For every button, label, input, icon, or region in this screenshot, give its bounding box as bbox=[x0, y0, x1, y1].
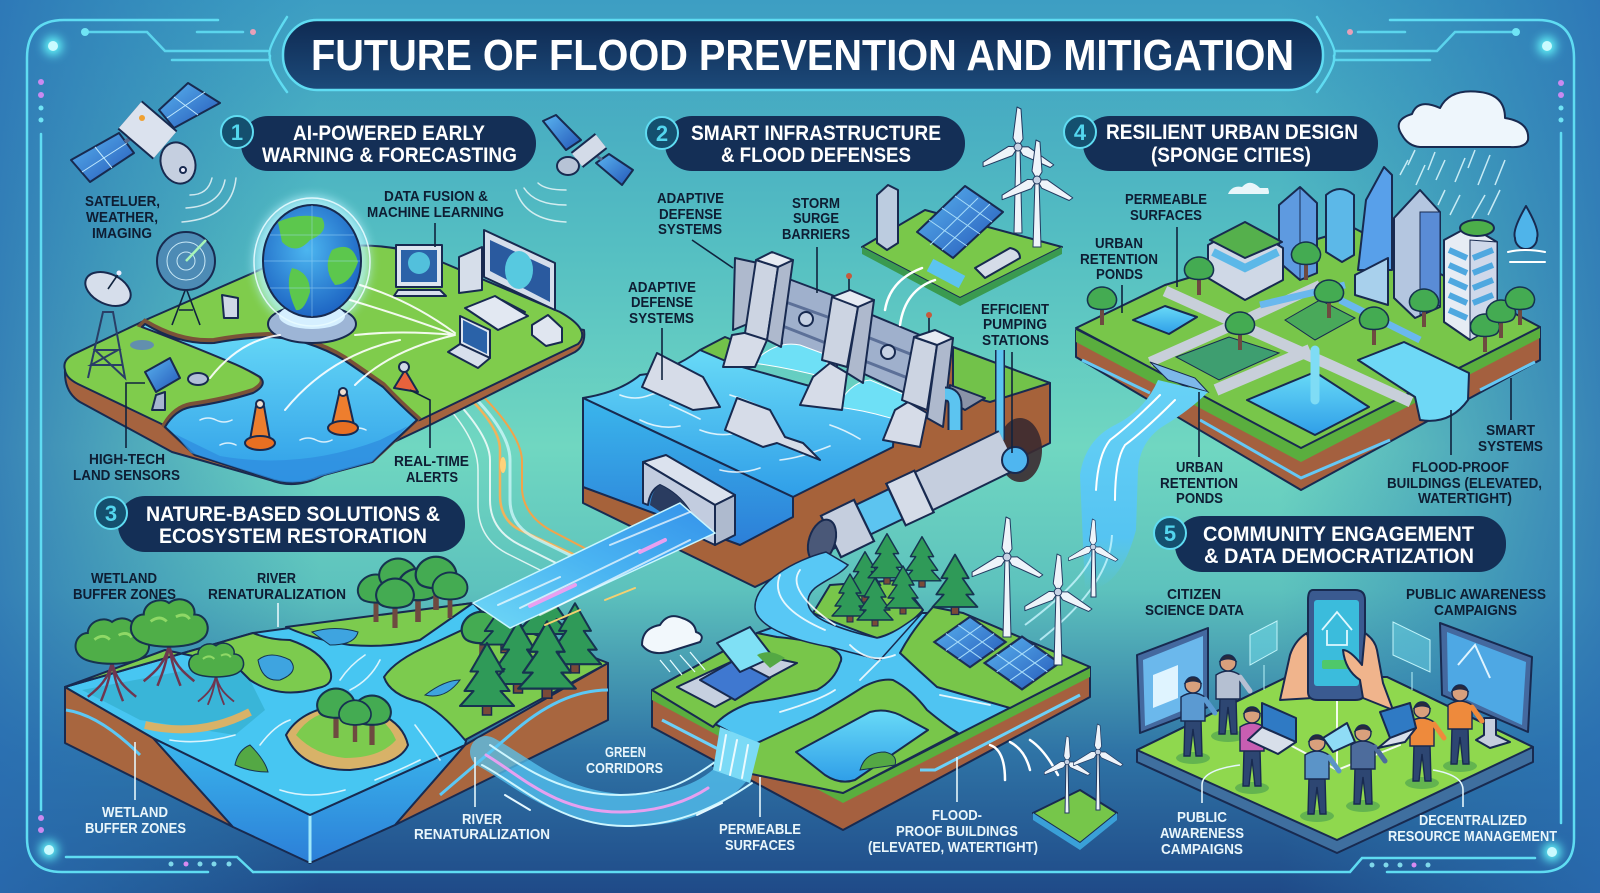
labels panel 5: CITIZEN bbox=[1167, 586, 1221, 603]
front bank bbox=[713, 680, 958, 793]
pipes bbox=[803, 350, 1042, 566]
retention pond bbox=[796, 711, 928, 782]
cascading water bbox=[753, 344, 910, 420]
labels panel 1 bbox=[73, 188, 504, 486]
buoys bbox=[245, 388, 358, 450]
storm surge gates bbox=[778, 275, 920, 400]
section heading 1 bbox=[221, 116, 536, 171]
culvert tunnel bbox=[643, 455, 735, 545]
leader lines bbox=[126, 223, 1511, 817]
labels panel 5: PUBLIC AWARENESS bbox=[1406, 586, 1546, 603]
panel 3: nature-based solutions bbox=[65, 557, 608, 863]
dish tower bbox=[80, 265, 136, 378]
river and lake bbox=[142, 322, 417, 481]
analysis arcs bbox=[210, 285, 455, 410]
forest peninsula bbox=[813, 580, 923, 638]
radar bbox=[157, 232, 215, 325]
section heading 4: 4 bbox=[1074, 120, 1087, 145]
panel 2: smart infrastructure bbox=[583, 252, 1050, 587]
title banner bbox=[283, 20, 1323, 90]
labels panel 3: WETLAND bbox=[91, 570, 157, 587]
labels panel 1: IMAGING bbox=[92, 225, 152, 242]
floating data cards bbox=[1250, 621, 1430, 690]
labels lower river island: (ELEVATED, WATERTIGHT) bbox=[868, 839, 1038, 856]
labels panel 2: SYSTEMS bbox=[629, 310, 694, 327]
labels panel 3: RENATURALIZATION bbox=[414, 826, 550, 843]
rain cloud bbox=[1399, 91, 1528, 218]
labels panel 5: SCIENCE DATA bbox=[1145, 602, 1244, 619]
labels panel 5: CAMPAIGNS bbox=[1161, 841, 1243, 858]
section heading 5: 5 bbox=[1164, 521, 1176, 546]
labels panel 4: PONDS bbox=[1176, 490, 1223, 507]
labels panel 3: BUFFER ZONES bbox=[85, 820, 186, 837]
labels panel 2: BARRIERS bbox=[782, 226, 850, 243]
labels lower river island: CORRIDORS bbox=[586, 760, 663, 777]
labels panel 1: MACHINE LEARNING bbox=[367, 204, 504, 221]
solar panels bbox=[934, 617, 1059, 689]
labels panel 5 bbox=[1145, 586, 1557, 858]
water face bbox=[583, 398, 793, 545]
water plane bbox=[652, 613, 1090, 793]
section heading 2: SMART INFRASTRUCTURE bbox=[691, 122, 941, 145]
labels panel 1: SATELUER, bbox=[85, 193, 160, 210]
labels panel 1: DATA FUSION & bbox=[384, 188, 488, 205]
section heading 5 bbox=[1154, 516, 1506, 572]
city buildings bbox=[1208, 167, 1497, 340]
section heading 3: 3 bbox=[105, 501, 117, 526]
labels panel 2: EFFICIENT bbox=[981, 301, 1049, 318]
title text: FUTURE OF FLOOD PREVENTION AND MITIGATION bbox=[311, 31, 1294, 80]
solar and wind mini island bbox=[862, 107, 1075, 325]
labels panel 4: FLOOD-PROOF bbox=[1412, 459, 1509, 476]
river surface bbox=[65, 603, 495, 815]
labels panel 2: PUMPING bbox=[983, 316, 1047, 333]
labels panel 2: ADAPTIVE bbox=[657, 190, 724, 207]
satellite signal arcs bbox=[182, 178, 566, 222]
section heading 5: & DATA DEMOCRATIZATION bbox=[1204, 545, 1474, 568]
small rain cloud bbox=[642, 616, 705, 675]
labels panel 4: SMART bbox=[1486, 422, 1535, 439]
island ground bbox=[64, 246, 582, 440]
labels panel 4: WATERTIGHT) bbox=[1418, 490, 1512, 507]
section heading 5: COMMUNITY ENGAGEMENT bbox=[1203, 523, 1474, 546]
green roof device bbox=[677, 627, 797, 707]
right display bbox=[1440, 623, 1532, 748]
people bbox=[1176, 655, 1482, 822]
labels panel 2: ADAPTIVE bbox=[628, 279, 696, 296]
section heading 3: ECOSYSTEM RESTORATION bbox=[159, 525, 427, 548]
section heading 2 bbox=[646, 116, 965, 171]
green corridor stream bbox=[482, 745, 752, 826]
labels panel 3: RIVER bbox=[462, 811, 502, 828]
panel 4: resilient urban design bbox=[1025, 167, 1540, 640]
labels panel 3: RIVER bbox=[257, 570, 296, 587]
labels panel 4: RETENTION bbox=[1160, 475, 1238, 492]
forest trees bbox=[317, 557, 601, 745]
section heading 1: WARNING & FORECASTING bbox=[262, 144, 517, 167]
labels panel 3: RENATURALIZATION bbox=[208, 586, 346, 603]
panel 1: AI-powered early warning bbox=[64, 196, 584, 484]
section heading 2: 2 bbox=[656, 121, 668, 146]
labels panel 5: RESOURCE MANAGEMENT bbox=[1388, 828, 1557, 845]
section heading 1: AI-POWERED EARLY bbox=[293, 122, 485, 145]
island base bbox=[65, 300, 584, 484]
water drop icon bbox=[1508, 206, 1545, 262]
section heading 4: RESILIENT URBAN DESIGN bbox=[1106, 121, 1358, 144]
labels panel 4: BUILDINGS (ELEVATED, bbox=[1387, 475, 1542, 492]
section heading 4 bbox=[1064, 116, 1378, 171]
labels panel 5: DECENTRALIZED bbox=[1419, 812, 1527, 829]
labels panel 5: PUBLIC bbox=[1177, 809, 1227, 826]
labels panel 5: AWARENESS bbox=[1160, 825, 1244, 842]
labels panel 5: CAMPAIGNS bbox=[1434, 602, 1517, 619]
big satellite bbox=[71, 83, 220, 189]
ponds bbox=[1133, 300, 1469, 435]
labels panel 2: SURGE bbox=[793, 210, 839, 227]
labels panel 2: STATIONS bbox=[982, 332, 1049, 349]
panel 5: community engagement bbox=[1137, 590, 1533, 853]
diagonal flood channel bbox=[473, 503, 715, 628]
labels panel 1: LAND SENSORS bbox=[73, 467, 180, 484]
labels panel 4: URBAN bbox=[1176, 459, 1223, 476]
small white cloud bbox=[1228, 183, 1269, 194]
stream from outfall bbox=[755, 552, 923, 660]
section heading 1: 1 bbox=[231, 120, 243, 145]
labels panel 3: BUFFER ZONES bbox=[73, 586, 176, 603]
wind turbines bbox=[969, 517, 1119, 665]
labels panel 2: STORM bbox=[792, 195, 840, 212]
green land areas bbox=[65, 633, 331, 692]
data fusion computers bbox=[394, 230, 562, 368]
left display bbox=[1137, 628, 1208, 733]
island side bbox=[652, 667, 1090, 830]
labels panel 4: PONDS bbox=[1096, 266, 1143, 283]
right soil bbox=[395, 663, 608, 825]
waterfall bbox=[713, 727, 760, 783]
forest pines bbox=[832, 534, 978, 626]
island top bbox=[1076, 228, 1540, 448]
lower river island bbox=[652, 517, 1119, 830]
labels lower river island: SURFACES bbox=[725, 837, 795, 854]
labels panel 2: DEFENSE bbox=[631, 294, 693, 311]
left soil bbox=[65, 687, 233, 827]
labels panel 3 bbox=[73, 570, 550, 843]
labels panel 1: ALERTS bbox=[406, 469, 458, 486]
barrier piers bbox=[723, 252, 953, 447]
small satellite bbox=[543, 115, 633, 185]
section heading 3: NATURE-BASED SOLUTIONS & bbox=[146, 503, 440, 526]
labels panel 4: PERMEABLE bbox=[1125, 191, 1207, 208]
right bank bbox=[900, 607, 1090, 708]
water volume bbox=[153, 738, 465, 863]
green bank bbox=[953, 347, 1050, 402]
labels panel 4 bbox=[1080, 191, 1543, 507]
land sensors bbox=[130, 295, 238, 410]
labels panel 2: DEFENSE bbox=[659, 206, 722, 223]
labels panel 2 bbox=[628, 190, 1049, 349]
section heading 2: & FLOOD DEFENSES bbox=[721, 144, 911, 167]
data streams between panels bbox=[420, 366, 592, 570]
laptops bbox=[1248, 703, 1416, 754]
labels panel 4: SYSTEMS bbox=[1478, 438, 1543, 455]
labels panel 4: URBAN bbox=[1095, 235, 1143, 252]
labels lower river island: PROOF BUILDINGS bbox=[896, 823, 1018, 840]
walkway bbox=[948, 385, 985, 410]
alert beacon bbox=[394, 362, 418, 392]
flow ripples bbox=[170, 655, 440, 795]
globe bbox=[254, 196, 370, 343]
paths and canals bbox=[1150, 285, 1420, 402]
labels panel 1: REAL-TIME bbox=[394, 453, 469, 470]
left bank bbox=[652, 633, 841, 727]
labels panel 3: WETLAND bbox=[102, 804, 168, 821]
small wind island bbox=[1033, 724, 1124, 850]
labels panel 4: RETENTION bbox=[1080, 251, 1158, 268]
urban trees bbox=[1087, 242, 1535, 352]
labels lower river island: GREEN bbox=[605, 744, 646, 761]
island side bbox=[1076, 327, 1540, 490]
water surface bbox=[583, 350, 895, 497]
soil block bbox=[583, 350, 1050, 587]
labels panel 2: SYSTEMS bbox=[658, 221, 722, 238]
section heading 4: (SPONGE CITIES) bbox=[1151, 144, 1311, 167]
labels panel 1: WEATHER, bbox=[86, 209, 158, 226]
adaptive defense wedges bbox=[642, 353, 820, 460]
platform bbox=[1137, 677, 1533, 853]
mangrove trees bbox=[76, 599, 244, 705]
section heading 3 bbox=[95, 496, 465, 552]
waterfall from grate bbox=[1025, 380, 1208, 640]
outflow arcs bbox=[990, 740, 1058, 780]
hands with phone bbox=[1280, 590, 1393, 710]
labels lower river island: FLOOD- bbox=[932, 807, 982, 824]
labels lower river island: PERMEABLE bbox=[719, 821, 801, 838]
labels lower river island bbox=[586, 744, 1038, 856]
labels panel 1: HIGH-TECH bbox=[89, 451, 165, 468]
labels panel 4: SURFACES bbox=[1130, 207, 1202, 224]
